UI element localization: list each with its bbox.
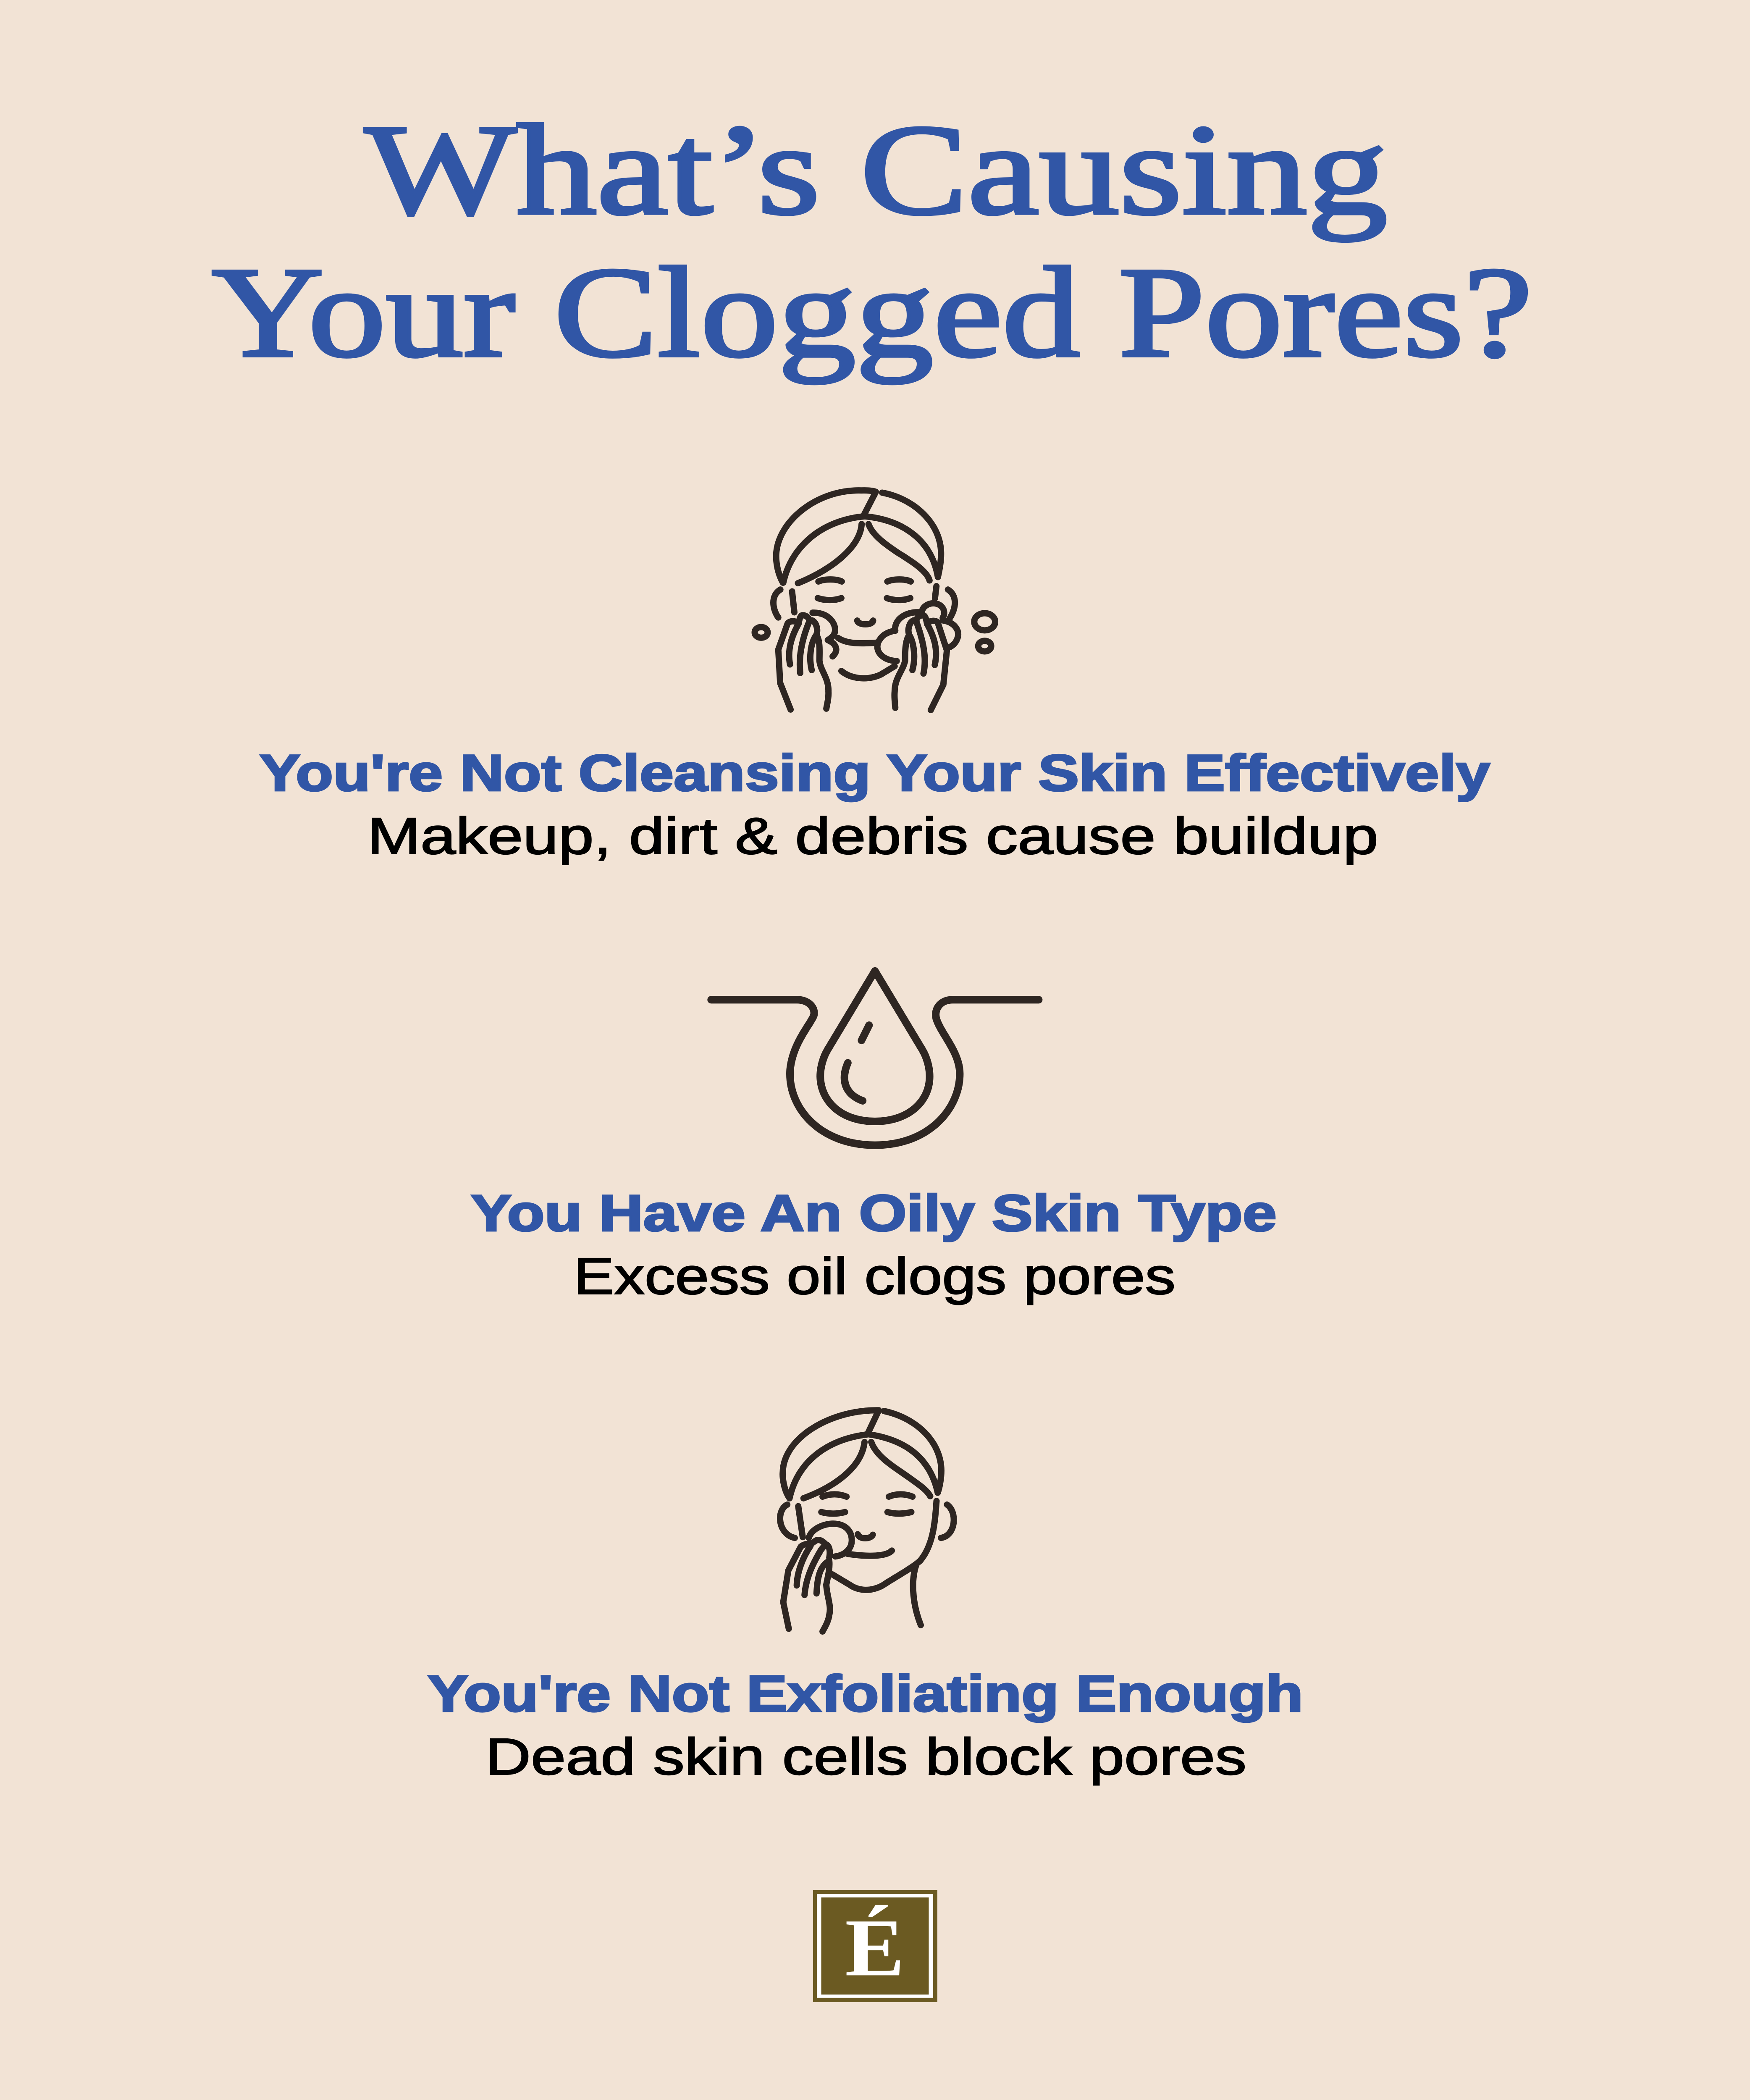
title: [212, 98, 1532, 384]
icon: woman exfoliating with pad: [780, 1410, 954, 1631]
heading: cleansing: You're Not Cleansing Your Skin Effectively: [260, 745, 1490, 802]
text: oily skin detail: Excess oil clogs pores: [574, 1247, 1175, 1305]
logo: É: [845, 1902, 905, 1993]
heading: exfoliating: You're Not Exfoliating Enough: [428, 1665, 1303, 1722]
icon: oil drop in pore: [711, 971, 1039, 1145]
title: Your Clogged Pores?: [212, 241, 1532, 384]
heading: oily skin: You Have An Oily Skin Type: [471, 1185, 1277, 1242]
logo: [813, 1890, 937, 2002]
panel: not cleansing effectively: [260, 491, 1490, 865]
panel: oily skin type: [471, 971, 1277, 1305]
text: cleansing detail: Makeup, dirt & debris cause buildup: [367, 807, 1378, 865]
icon: woman washing face with foam: [755, 491, 995, 710]
panel: not exfoliating: [428, 1410, 1303, 1785]
text: exfoliating detail: Dead skin cells block pores: [485, 1727, 1246, 1785]
title: What’s Causing: [365, 98, 1388, 242]
